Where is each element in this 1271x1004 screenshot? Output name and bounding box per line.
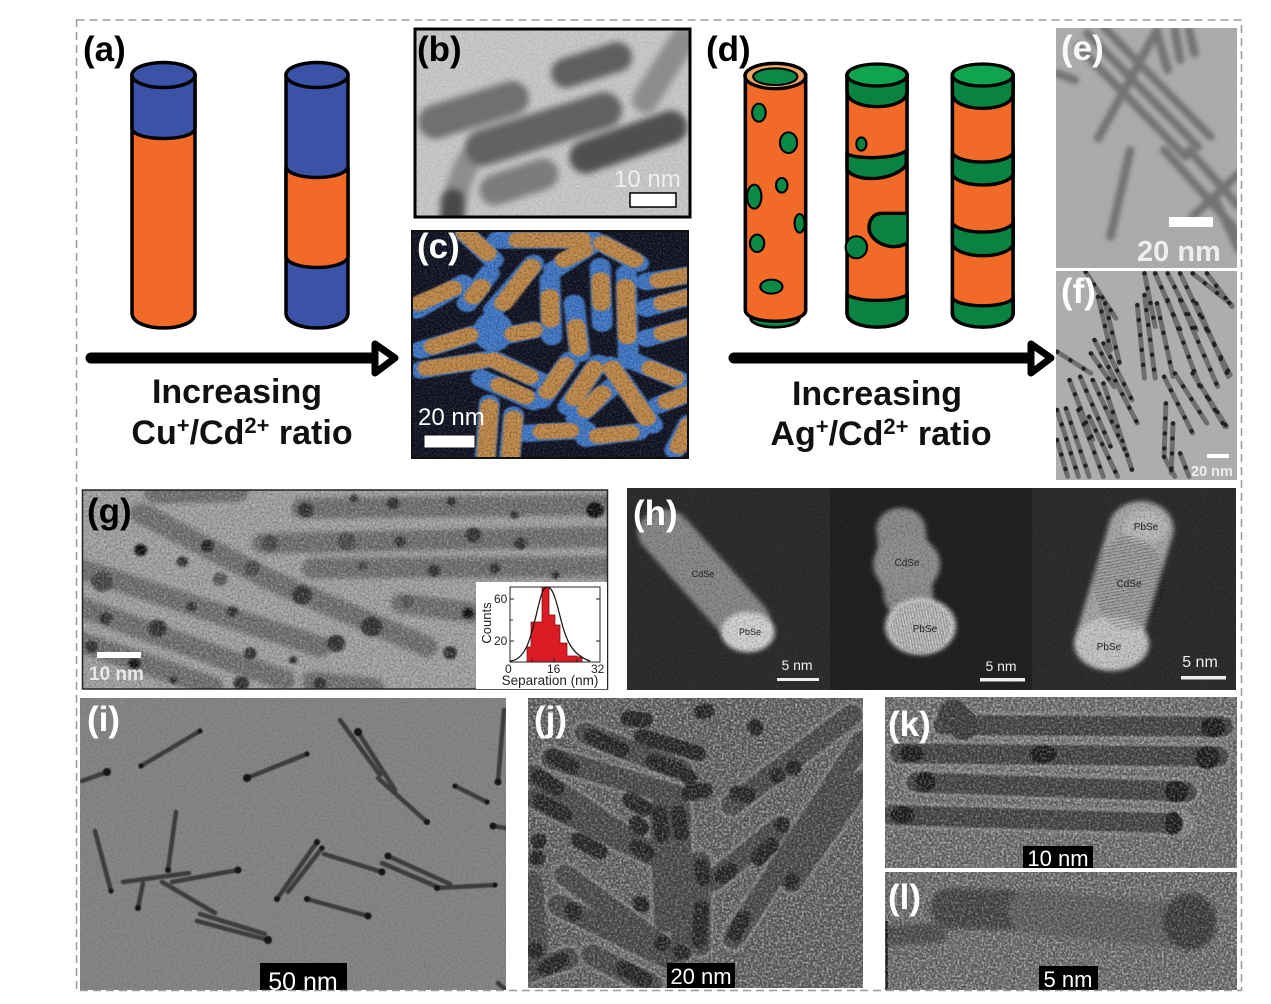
- scale e: [1137, 217, 1221, 268]
- panel k: HRTEM: [885, 697, 1237, 871]
- compound labels: CdSe: [894, 558, 920, 569]
- scale f: [1191, 454, 1233, 480]
- rod tips i: [103, 728, 502, 944]
- scale c: [418, 404, 485, 448]
- cylinder: full green bands: [952, 64, 1013, 327]
- axis tick labels: [494, 592, 605, 676]
- caption a ratio: ratio: [269, 414, 353, 452]
- caption a ratio: +: [177, 413, 190, 438]
- panel a: Cu schematic: [83, 30, 395, 452]
- label b: (b): [417, 30, 462, 69]
- scale g: [89, 652, 144, 685]
- axis tick labels: 60: [494, 592, 508, 606]
- caption a ratio: Cu: [131, 414, 177, 452]
- caption a ratio: /Cd: [190, 414, 244, 452]
- arrow d: [734, 344, 1051, 373]
- label c: (c): [417, 227, 460, 266]
- compound labels: PbSe: [739, 627, 761, 637]
- label d: (d): [706, 30, 751, 69]
- panel i: TEM rods: [80, 698, 506, 996]
- arrow a: [91, 344, 395, 373]
- label a: (a): [83, 30, 126, 69]
- y axis title: Counts: [479, 602, 494, 644]
- scale bars h: 5 nm: [1182, 654, 1218, 671]
- caption d ratio: 2+: [883, 414, 908, 439]
- scale g: 10 nm: [89, 664, 144, 685]
- label e: (e): [1061, 29, 1104, 68]
- scale bars h: 5 nm: [781, 657, 813, 673]
- panel d: Ag schematic: [706, 30, 1051, 453]
- axis tick labels: 16: [547, 662, 561, 676]
- label h: (h): [633, 494, 678, 533]
- panel g: TEM with histogram inset: [82, 490, 609, 691]
- axis tick labels: 20: [494, 634, 508, 648]
- cylinder: partial green segments: [846, 64, 907, 327]
- label j: (j): [534, 700, 567, 739]
- compound labels: PbSe: [1097, 642, 1122, 653]
- caption d ratio: Ag: [770, 415, 816, 453]
- axis tick labels: 32: [591, 662, 605, 676]
- caption a ratio: 2+: [244, 413, 269, 438]
- cylinder: blue ends orange centre: [286, 62, 348, 328]
- label i: (i): [87, 700, 120, 739]
- scale bars h: 5 nm: [985, 658, 1017, 674]
- label f: (f): [1061, 272, 1096, 311]
- compound labels: PbSe: [913, 624, 938, 635]
- scale f: 20 nm: [1191, 464, 1233, 480]
- caption d ratio: +: [816, 414, 829, 439]
- scale box i: 50 nm: [268, 968, 338, 996]
- panel f: TEM with dotted rods: [1056, 271, 1237, 480]
- label k: (k): [888, 705, 931, 744]
- panel b: TEM: [414, 28, 691, 225]
- compound labels: [692, 522, 1159, 653]
- scale box l: 5 nm: [1044, 967, 1092, 992]
- caption d ratio: /Cd: [829, 415, 883, 453]
- panel l: HRTEM: [885, 872, 1237, 992]
- rods i: [82, 710, 506, 990]
- scale bars h: [777, 654, 1226, 682]
- scale e: 20 nm: [1137, 236, 1221, 268]
- scale b: 10 nm: [614, 166, 681, 193]
- panel j: HRTEM: [528, 698, 863, 989]
- histogram inset: [476, 582, 607, 689]
- scale b: [614, 166, 681, 207]
- panel c: elemental map: [412, 227, 689, 458]
- axis tick labels: 0: [505, 662, 512, 676]
- label l: (l): [888, 878, 921, 917]
- x axis title: Separation (nm): [502, 673, 598, 688]
- caption a: Increasing: [152, 373, 322, 411]
- panel h: HAADF images: [627, 488, 1236, 690]
- panel e: TEM: [1056, 27, 1239, 268]
- compound labels: CdSe: [1116, 579, 1142, 590]
- caption d: Increasing: [792, 375, 962, 413]
- scale box k: 10 nm: [1027, 846, 1089, 871]
- cylinder: orange with green spots: [745, 63, 806, 327]
- cylinder: blue cap orange rod: [132, 62, 195, 328]
- scale c: 20 nm: [418, 404, 485, 431]
- histogram bars: [527, 587, 582, 662]
- plot frame: [510, 587, 600, 662]
- gaussian fit: [510, 587, 590, 661]
- compound labels: PbSe: [1134, 522, 1159, 533]
- scale box i: [260, 963, 347, 990]
- caption d ratio: ratio: [908, 415, 992, 453]
- compound labels: CdSe: [692, 569, 714, 579]
- scale box j: 20 nm: [670, 964, 732, 989]
- label g: (g): [87, 492, 132, 531]
